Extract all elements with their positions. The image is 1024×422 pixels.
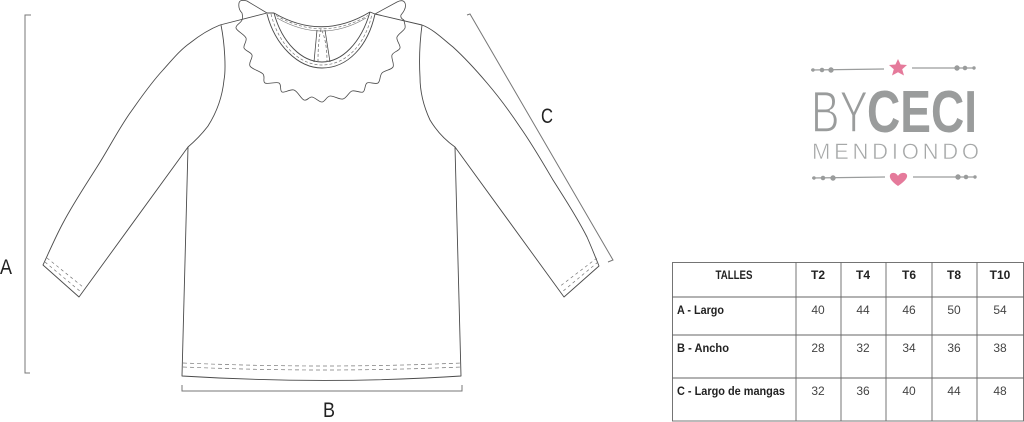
table header: TALLES [716, 268, 752, 282]
row A: 44 [856, 303, 870, 317]
row B [677, 341, 1007, 355]
row B: 38 [993, 341, 1007, 355]
row C [677, 384, 1007, 398]
row B: 28 [811, 341, 825, 355]
measure B [182, 385, 462, 391]
row A: A - Largo [677, 303, 724, 317]
icon: heart [890, 173, 907, 186]
table header: T10 [990, 268, 1011, 282]
row C: 32 [811, 384, 825, 398]
row C: 36 [856, 384, 870, 398]
row A: 46 [902, 303, 916, 317]
row C: C - Largo de mangas [677, 384, 785, 398]
right sleeve [422, 25, 599, 297]
icon: star [889, 59, 907, 76]
row C: 44 [947, 384, 961, 398]
row A [677, 303, 1007, 317]
label C: C [541, 105, 553, 128]
row A: 50 [947, 303, 961, 317]
table header: T8 [947, 268, 961, 282]
logo [811, 59, 979, 186]
logo bottom ornament [812, 175, 976, 180]
shirt technical drawing [43, 0, 599, 380]
row A: 40 [811, 303, 825, 317]
logo subtitle: MENDIONDO [812, 139, 979, 164]
neckline [267, 12, 375, 68]
label A: A [0, 256, 12, 279]
logo name CECI: CECI [867, 79, 977, 145]
logo top ornament [811, 66, 975, 72]
row C: 48 [993, 384, 1007, 398]
table header: T6 [902, 268, 916, 282]
row B: 32 [856, 341, 870, 355]
left sleeve [43, 25, 220, 297]
row B: B - Ancho [677, 341, 729, 355]
table header: T4 [856, 268, 870, 282]
row C: 40 [902, 384, 916, 398]
row B: 36 [947, 341, 961, 355]
row B: 34 [902, 341, 916, 355]
table header: T2 [811, 268, 825, 282]
table grid [672, 262, 1024, 421]
size table [672, 262, 1024, 421]
logo name BY: BY [811, 80, 868, 145]
ruffled collar [236, 0, 406, 102]
measure A [25, 15, 31, 373]
measure C [467, 14, 613, 262]
shirt body [182, 12, 461, 380]
table header [716, 268, 1011, 282]
back placket [314, 29, 330, 62]
label B: B [323, 399, 335, 422]
row A: 54 [993, 303, 1007, 317]
